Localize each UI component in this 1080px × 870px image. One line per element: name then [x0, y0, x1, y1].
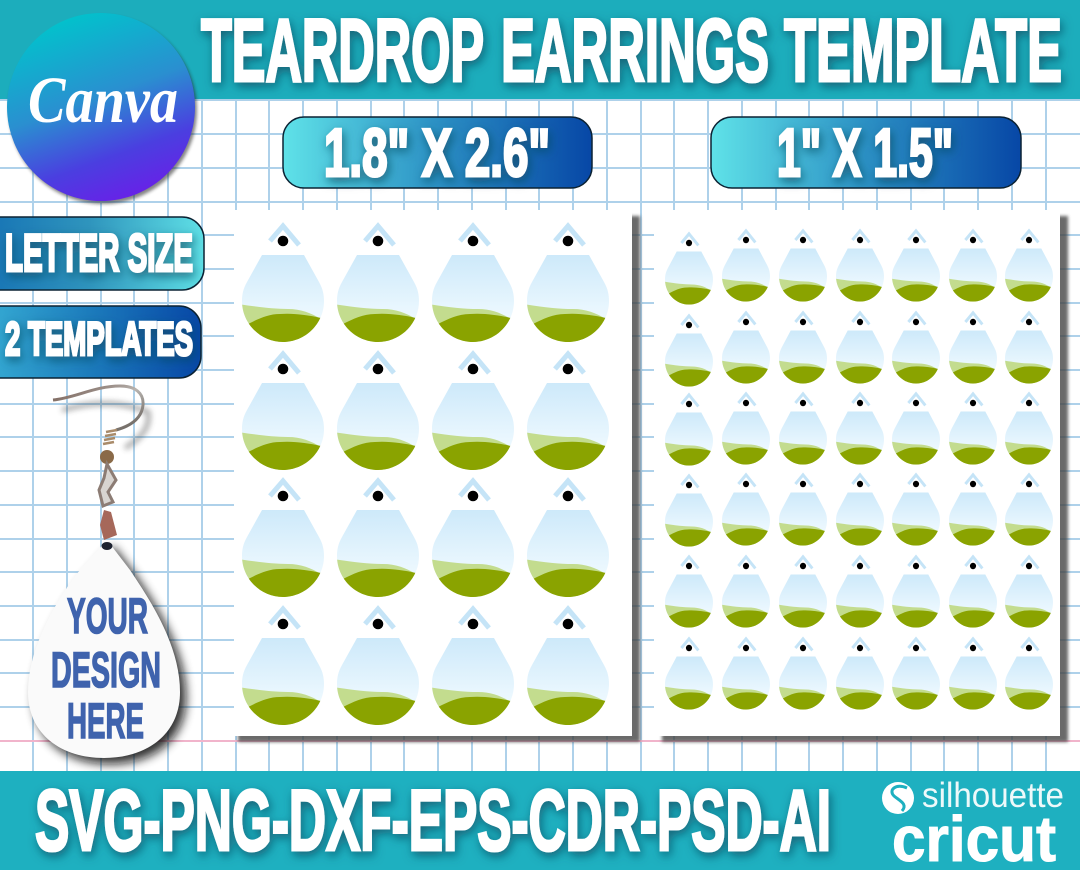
icon: earring with your design here	[28, 386, 186, 764]
title: TEARDROP	[201, 0, 484, 100]
panel: large teardrop template sheet	[234, 210, 640, 742]
pill: 2 templates	[0, 306, 201, 378]
pill: letter size	[0, 217, 204, 290]
title	[201, 0, 1062, 100]
header band	[0, 0, 1080, 99]
title: EARRINGS	[501, 0, 769, 100]
icon: earring with your design here: DESIGN	[51, 642, 161, 698]
icon: earring with your design here: HERE	[67, 693, 144, 749]
pill: letter size: LETTER SIZE	[5, 224, 193, 283]
footer band	[0, 771, 1080, 870]
Canva logo badge: Canva	[28, 64, 178, 137]
Canva logo badge	[7, 13, 197, 204]
icon: earring with your design here: YOUR	[67, 588, 148, 644]
size pill: 1 x 1.5: 1" X 1.5"	[777, 115, 953, 191]
logo: silhouette: silhouette	[922, 776, 1064, 815]
pill: 2 templates: 2 TEMPLATES	[5, 312, 193, 365]
panel: small teardrop template sheet	[654, 210, 1068, 742]
size pill: 1.8 x 2.6: 1.8" X 2.6"	[324, 115, 550, 191]
